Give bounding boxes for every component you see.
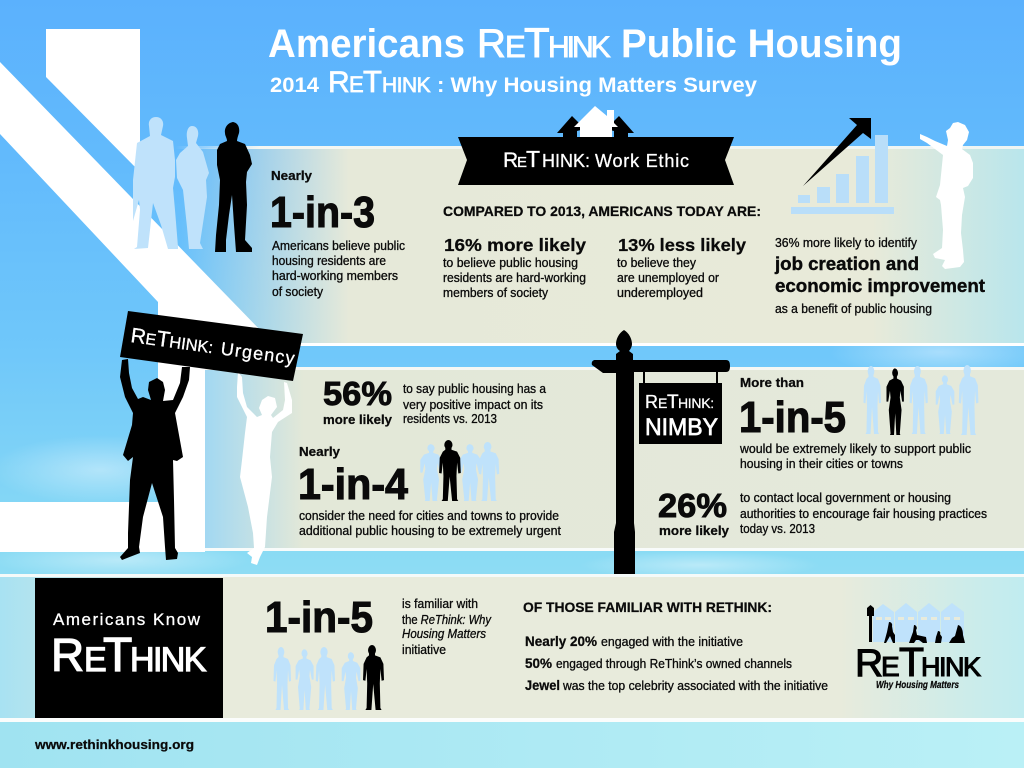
stat: nearly 1-in-3: Nearly <box>271 168 313 183</box>
figure: white woman holding sign <box>237 372 292 565</box>
subtitle: T <box>363 64 382 99</box>
stat: 1-in-5 familiar: is familiar with <box>402 597 478 611</box>
subtitle: HINK <box>382 74 431 97</box>
banner: work ethic: T <box>526 146 540 172</box>
clouds <box>0 326 1024 579</box>
logo: rethink why housing matters: R <box>855 642 883 685</box>
stat: 13% less likely: are unemployed or <box>617 271 719 285</box>
panel: urgency and nimby background <box>205 367 1024 551</box>
stat: more than 1-in-5: housing in their cities or towns <box>740 457 903 471</box>
title: E <box>505 29 526 64</box>
banner: work ethic: HINK: <box>542 151 590 171</box>
heading: of those familiar: OF THOSE FAMILIAR WITH RETHINK: <box>523 599 772 615</box>
list: engagement findings: engaged through ReThink’s owned channels <box>556 657 792 671</box>
subtitle: : Why Housing Matters Survey <box>437 74 757 97</box>
stat: 56% more likely: very positive impact on its <box>403 398 543 412</box>
stat: 36% job creation: economic improvement <box>775 276 985 296</box>
title: T <box>524 19 550 66</box>
stat: nearly 1-in-3: of society <box>272 285 324 299</box>
stat: 1-in-5 familiar: initiative <box>402 643 446 657</box>
sign: urgency: R <box>129 324 147 349</box>
stat: 1-in-5 familiar <box>265 593 492 657</box>
figures: four people, one highlighted <box>420 440 499 501</box>
stat: 56% more likely <box>323 375 546 427</box>
logo: rethink why housing matters: E <box>881 651 900 682</box>
figure: construction worker <box>920 122 973 269</box>
stat: 16% more likely <box>443 235 586 300</box>
stat: 26% more likely: today vs. 2013 <box>740 522 815 536</box>
logo: rethink why housing matters: Why Housing Matters <box>876 680 959 691</box>
logo: rethink why housing matters <box>855 603 981 691</box>
sign post: nimby: R <box>645 392 658 412</box>
stat: 26% more likely: 26% <box>658 487 727 524</box>
list: engagement findings: Nearly 20% <box>525 634 597 649</box>
stat: 26% more likely: to contact local government or housing <box>740 491 951 505</box>
stat: 1-in-5 familiar: 1-in-5 <box>265 593 373 642</box>
subtitle: E <box>349 72 364 97</box>
box: americans know rethink: T <box>103 629 132 682</box>
stat: 56% more likely: 56% <box>323 375 392 412</box>
stat: more than 1-in-5: would be extremely likely to support public <box>739 442 971 456</box>
list: engagement findings: was the top celebrity associated with the initiative <box>562 679 828 693</box>
stat: nearly 1-in-4: consider the need for cities and towns to provide <box>299 509 559 523</box>
stat: nearly 1-in-4: 1-in-4 <box>298 460 408 509</box>
sign: urgency: T <box>155 326 172 352</box>
stat: 1-in-5 familiar: the ReThink: Why <box>402 613 492 627</box>
stat: 36% job creation: 36% more likely to identify <box>775 236 918 250</box>
stat: 26% more likely: more likely <box>659 523 730 538</box>
list: engagement findings: Jewel <box>525 678 560 693</box>
stat: 26% more likely: authorities to encourage fair housing practices <box>740 507 987 521</box>
figures: five people, one highlighted <box>274 645 384 710</box>
stat: 56% more likely: to say public housing has a <box>403 382 546 396</box>
stat: 56% more likely: more likely <box>323 412 393 427</box>
figure: man holding sign <box>120 359 190 560</box>
sign post: nimby: T <box>667 392 679 413</box>
icon: house above banner <box>557 106 634 137</box>
heading: compared to 2013: COMPARED TO 2013, AMERICANS TODAY ARE: <box>443 203 761 219</box>
box: americans know rethink: R <box>51 629 84 681</box>
stat: nearly 1-in-3: hard-working members <box>272 269 398 283</box>
box: americans know rethink: HINK <box>130 641 207 679</box>
stat: more than 1-in-5 <box>739 375 971 471</box>
figures: three people, one highlighted <box>133 117 252 252</box>
panel: work ethic background <box>175 146 1024 346</box>
house outline graphic <box>0 29 262 552</box>
stat: 13% less likely: to believe they <box>617 256 697 270</box>
subtitle: 2014 <box>270 74 319 97</box>
box: americans know rethink <box>35 578 223 718</box>
banner: work ethic <box>458 137 734 185</box>
stat: 56% more likely: residents vs. 2013 <box>403 412 497 426</box>
box: americans know rethink: E <box>84 641 107 679</box>
box: americans know rethink: Americans Know <box>53 610 201 629</box>
list: engagement findings: engaged with the initiative <box>601 635 743 649</box>
sign: urgency: HINK: <box>168 333 214 357</box>
stat: nearly 1-in-4: additional public housing to be extremely urgent <box>299 524 562 538</box>
logo: rethink why housing matters: HINK <box>921 652 981 682</box>
sign: urgency <box>120 311 303 381</box>
chart icon: bars and arrow <box>791 118 894 214</box>
stat: nearly 1-in-3: 1-in-3 <box>270 188 375 237</box>
sign: urgency: Urgency <box>220 338 297 369</box>
title: Public Housing <box>621 22 902 66</box>
stat: more than 1-in-5: More than <box>740 375 804 390</box>
stat: nearly 1-in-3 <box>270 168 405 299</box>
subtitle: R <box>328 66 350 99</box>
banner: work ethic: Work Ethic <box>595 151 689 171</box>
stat: 16% more likely: 16% more likely <box>444 235 586 255</box>
stat: 36% job creation <box>774 236 985 316</box>
stat: more than 1-in-5: 1-in-5 <box>739 393 846 442</box>
figures: five people, one highlighted <box>864 365 978 435</box>
stat: 26% more likely <box>658 487 987 538</box>
banner: work ethic: E <box>517 154 527 171</box>
sign post: nimby: E <box>658 395 667 411</box>
panel: americans know background <box>0 574 1024 722</box>
stat: 1-in-5 familiar: Housing Matters <box>402 627 486 641</box>
stat: 16% more likely: to believe public housing <box>443 256 578 270</box>
website url: www.rethinkhousing.org <box>34 737 194 752</box>
subtitle <box>270 64 757 99</box>
bottom sky band <box>0 720 1024 768</box>
sign post: nimby: HINK: <box>678 395 714 411</box>
stat: 13% less likely <box>617 235 746 300</box>
sign post: nimby: NIMBY <box>645 414 718 441</box>
logo: rethink why housing matters: T <box>899 639 924 685</box>
stat: 36% job creation: job creation and <box>774 254 919 274</box>
list: engagement findings <box>525 634 828 693</box>
list: engagement findings: 50% <box>525 656 552 671</box>
banner: work ethic: R <box>503 149 518 172</box>
stat: nearly 1-in-3: Americans believe public <box>272 239 405 253</box>
title: HINK <box>548 31 611 64</box>
stat: nearly 1-in-4 <box>298 444 562 538</box>
sign post: nimby <box>592 330 730 574</box>
stat: nearly 1-in-4: Nearly <box>299 444 341 459</box>
title: R <box>477 22 506 66</box>
sign: urgency: E <box>144 331 157 349</box>
stat: 13% less likely: underemployed <box>617 286 703 300</box>
stat: 13% less likely: 13% less likely <box>618 235 746 255</box>
stat: 36% job creation: as a benefit of public housing <box>775 302 932 316</box>
stat: 16% more likely: residents are hard-working <box>443 271 586 285</box>
title <box>268 19 902 66</box>
title: Americans <box>268 22 465 66</box>
stat: 16% more likely: members of society <box>443 286 549 300</box>
stat: nearly 1-in-3: housing residents are <box>272 254 386 268</box>
